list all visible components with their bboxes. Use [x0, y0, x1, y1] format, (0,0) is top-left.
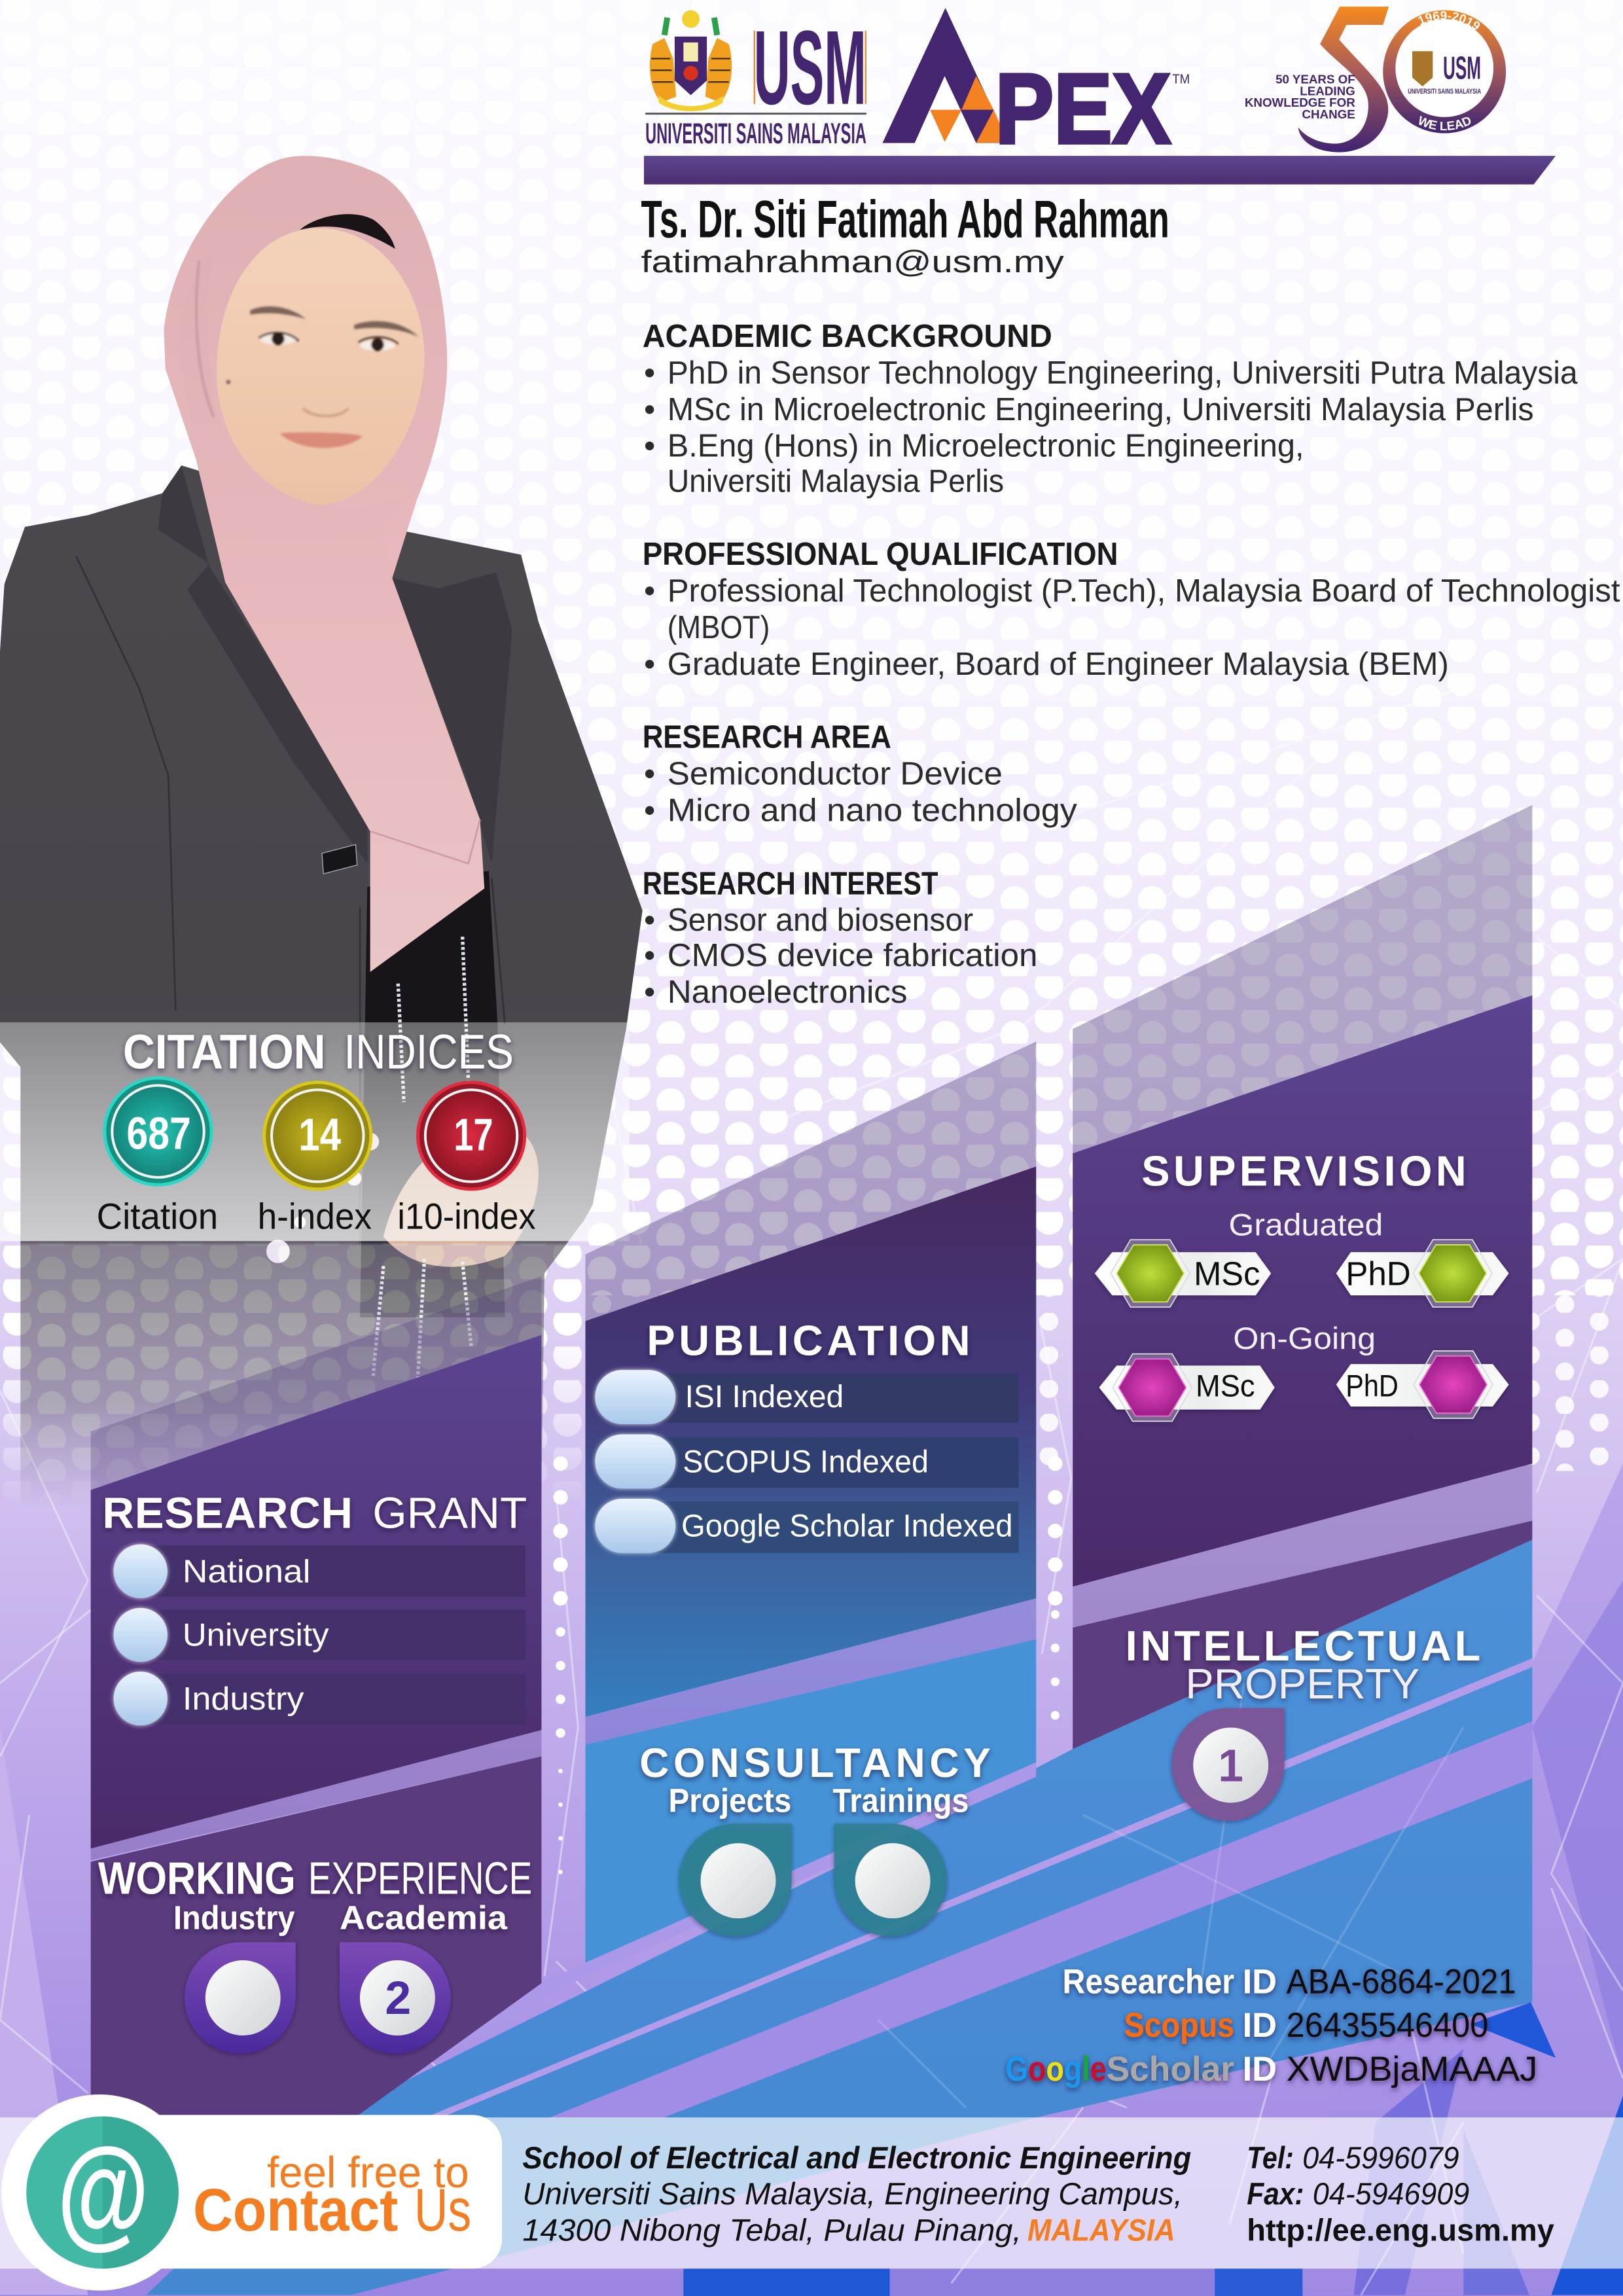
chip: on-going MSc: MSc	[1196, 1368, 1255, 1403]
text block: research area	[643, 719, 1077, 829]
row: Google Scholar indexed: Google Scholar Indexed	[681, 1508, 1012, 1543]
text block: academic background: PhD in Sensor Technology Engineering, Universiti Putra Malaysia	[668, 355, 1578, 391]
text block: research interest: Nanoelectronics	[668, 974, 907, 1010]
scopus id: ID	[1243, 2006, 1277, 2045]
logo: 50 years of USM: WE LEAD	[1419, 116, 1471, 131]
text: phone, fax, web: Tel:	[1247, 2140, 1294, 2175]
heading: citation indices: CITATION	[123, 1024, 326, 1079]
crest	[650, 10, 732, 111]
stat: academia	[340, 1898, 508, 2053]
text: feel free to contact us: Contact	[193, 2177, 398, 2244]
text block: research interest: •	[644, 937, 655, 973]
heading: research grant: RESEARCH	[103, 1489, 353, 1538]
google scholar id	[1005, 2050, 1537, 2089]
text block: professional qualification: (MBOT)	[668, 609, 770, 645]
badge: intellectual property count	[1171, 1708, 1285, 1821]
lapels	[158, 465, 512, 863]
text block: professional qualification	[643, 536, 1620, 682]
logo: 50 years of USM: KNOWLEDGE FOR	[1245, 96, 1355, 109]
logo: 50 years of USM: 1969-2019	[1418, 11, 1480, 30]
row: ISI indexed	[595, 1370, 1018, 1424]
panel: publication	[585, 1041, 1036, 1717]
heading: supervision: SUPERVISION	[1141, 1147, 1467, 1194]
metric: citation 687: Citation	[97, 1196, 218, 1237]
metric: i10-index 17	[397, 1081, 536, 1237]
text block: professional qualification: •	[644, 646, 655, 682]
metric: h-index 14: 14	[298, 1109, 341, 1160]
heading: working experience: WORKING	[98, 1853, 296, 1904]
jacket	[0, 465, 643, 1507]
panel: research grant	[91, 1276, 541, 1848]
logo: 50 years of USM	[1245, 7, 1507, 152]
stat: projects: Projects	[669, 1781, 791, 1819]
text block: research interest	[643, 865, 1038, 1010]
text: USM	[754, 9, 866, 127]
text: phone, fax, web: Fax:	[1247, 2176, 1304, 2211]
google scholar id: Scholar	[1107, 2050, 1234, 2089]
text: on-going: On-Going	[1233, 1321, 1376, 1355]
jacket details	[76, 556, 505, 1244]
text: graduated: Graduated	[1229, 1207, 1383, 1242]
beads and floral	[373, 937, 471, 1390]
stat: industry	[173, 1898, 296, 2053]
heading: working experience: EXPERIENCE	[308, 1853, 532, 1904]
text block: research interest: Sensor and biosensor	[668, 902, 973, 938]
text: feel free to contact us: Us	[414, 2177, 471, 2244]
google scholar id: XWDBjaMAAAJ	[1287, 2050, 1537, 2089]
metric: h-index 14: h-index	[258, 1196, 372, 1237]
stat: projects	[669, 1781, 792, 1937]
logo: 50 years of USM: CHANGE	[1302, 107, 1355, 121]
header bar	[644, 156, 1556, 185]
stat: trainings	[832, 1781, 969, 1937]
scopus id: Scopus	[1124, 2006, 1234, 2045]
stat: trainings: Trainings	[832, 1781, 969, 1819]
researcher identifiers	[1005, 1962, 1537, 2089]
heading: intellectual property	[1126, 1622, 1480, 1708]
logo: 50 years of USM: UNIVERSITI SAINS MALAYSIA	[1408, 88, 1481, 96]
row: national: National	[183, 1553, 311, 1589]
text block: academic background: B.Eng (Hons) in Microelectronic Engineering,	[668, 428, 1304, 464]
heading: working experience	[98, 1853, 532, 1904]
researcher id: ID	[1243, 1962, 1277, 2001]
researcher id: ABA-6864-2021	[1287, 1962, 1516, 2001]
text block: professional qualification: Graduate Engineer, Board of Engineer Malaysia (BEM)	[668, 646, 1449, 682]
text: phone, fax, web: 04-5946909	[1313, 2176, 1469, 2211]
chip: on-going PhD: PhD	[1346, 1368, 1399, 1403]
row: SCOPUS indexed: SCOPUS Indexed	[683, 1444, 929, 1480]
photo: woman in pink hijab and dark blazer	[0, 156, 643, 1507]
logo: APEX: TM	[1172, 72, 1190, 86]
text block: academic background: MSc in Microelectronic Engineering, Universiti Malaysia Perlis	[668, 391, 1534, 427]
heading: intellectual property: PROPERTY	[1185, 1660, 1419, 1708]
chip: graduated MSc	[1095, 1240, 1271, 1307]
researcher id: Researcher	[1063, 1962, 1234, 2001]
text block: academic background	[643, 318, 1578, 499]
logo: Universiti Sains Malaysia	[645, 9, 866, 150]
translucent band	[585, 1041, 1036, 1321]
text block: research area: •	[644, 756, 655, 792]
text block: professional qualification: PROFESSIONAL QUALIFICATION	[643, 536, 1118, 572]
icon: at-sign circle	[1, 2094, 198, 2291]
inner black top	[360, 871, 505, 1318]
text: phone, fax, web: http://ee.eng.usm.my	[1247, 2213, 1554, 2248]
heading: citation indices: INDICES	[344, 1024, 514, 1079]
stat: academia: 2	[385, 1972, 411, 2024]
row: national	[114, 1544, 526, 1598]
text block: research area: Micro and nano technology	[668, 793, 1077, 829]
metric: h-index 14	[258, 1081, 372, 1237]
text: address	[522, 2140, 1191, 2248]
chip: graduated MSc: MSc	[1194, 1254, 1260, 1292]
metric: citation 687: 687	[126, 1107, 191, 1158]
google scholar id: ID	[1243, 2050, 1277, 2089]
stat: academia: Academia	[340, 1898, 508, 1936]
text block: research interest: •	[644, 974, 655, 1010]
row: industry	[114, 1672, 526, 1725]
row: university	[114, 1608, 526, 1662]
footer band	[0, 2094, 1623, 2291]
jacket brooch	[322, 844, 357, 874]
panel: intellectual property	[1073, 1520, 1532, 1821]
metric: i10-index 17: 17	[454, 1109, 493, 1160]
google scholar id: Google	[1005, 2050, 1107, 2089]
panel: consultancy	[585, 1640, 1036, 1963]
row: university: University	[183, 1617, 329, 1653]
text: phone, fax, web	[1247, 2140, 1554, 2248]
text: address: Universiti Sains Malaysia, Engineering Campus,	[522, 2176, 1183, 2211]
scopus id	[1124, 2006, 1488, 2045]
text block: research area: RESEARCH AREA	[643, 719, 891, 755]
row: industry: Industry	[183, 1681, 304, 1717]
hands	[383, 1128, 539, 1267]
heading: publication: PUBLICATION	[647, 1317, 971, 1365]
text block: academic background: Universiti Malaysia Perlis	[668, 463, 1004, 499]
text block: academic background: ACADEMIC BACKGROUND	[643, 318, 1052, 354]
chip: graduated PhD	[1336, 1240, 1509, 1307]
text: feel free to contact us: feel free to	[267, 2148, 469, 2197]
chip: on-going PhD	[1336, 1351, 1509, 1418]
text: address: MALAYSIA	[1027, 2213, 1175, 2248]
panel: working experience	[91, 1756, 541, 2115]
heading: research grant	[103, 1489, 527, 1538]
text: email: fatimahrahman@usm.my	[641, 244, 1064, 279]
text block: academic background: •	[644, 391, 655, 427]
chip: on-going MSc	[1099, 1354, 1275, 1421]
chip: graduated PhD: PhD	[1346, 1254, 1411, 1292]
blue diagonal background strips	[147, 1540, 1556, 2295]
hijab front drape	[179, 246, 484, 972]
translucent connector bands between panels	[91, 1463, 1532, 1860]
text: address: School of Electrical and Electronic Engineering	[522, 2140, 1191, 2175]
row: ISI indexed: ISI Indexed	[685, 1379, 844, 1414]
translucent band	[1073, 805, 1532, 1153]
heading: consultancy: CONSULTANCY	[639, 1740, 991, 1786]
researcher id	[1063, 1962, 1516, 2001]
text block: research area: Semiconductor Device	[668, 756, 1003, 792]
logo: Universiti Sains Malaysia: UNIVERSITI SAINS MALAYSIA	[645, 118, 866, 150]
eyes, brows, nose, mouth	[226, 306, 419, 448]
translucent band	[91, 1276, 541, 1490]
panel: supervision	[1073, 805, 1532, 1587]
logo: 50 years of USM: LEADING	[1300, 84, 1355, 98]
text block: professional qualification: •	[644, 573, 655, 609]
text block: research interest: CMOS device fabrication	[668, 937, 1038, 973]
heading: research grant: GRANT	[372, 1489, 527, 1538]
gap dot columns	[560, 1463, 1055, 1895]
logo: 50 years of USM: USM	[1443, 50, 1481, 86]
logo: APEX: PEX	[995, 53, 1171, 164]
text: feel free to contact us	[193, 2148, 471, 2244]
text block: academic background: •	[644, 428, 655, 464]
contact pill	[88, 2115, 502, 2269]
text block: research interest: RESEARCH INTEREST	[643, 865, 938, 901]
title: name: Ts. Dr. Siti Fatimah Abd Rahman	[641, 190, 1169, 249]
face	[217, 228, 425, 505]
text block: professional qualification: Professional Technologist (P.Tech), Malaysia Board of Technologist	[668, 573, 1620, 609]
text block: research interest: •	[644, 902, 655, 938]
scopus id: 26435546400	[1287, 2006, 1488, 2045]
logo: APEX	[882, 8, 1190, 164]
text block: academic background: •	[644, 355, 655, 391]
row: SCOPUS indexed	[595, 1435, 1018, 1488]
row: Google Scholar indexed	[595, 1499, 1018, 1553]
heading: citation indices	[123, 1024, 514, 1079]
panel: citation indices band	[0, 1022, 630, 1241]
hijab back	[164, 156, 484, 972]
badge: intellectual property count: 1	[1218, 1740, 1243, 1791]
text: address: 14300 Nibong Tebal, Pulau Pinang,	[522, 2213, 1022, 2248]
under cap	[300, 214, 395, 249]
text block: research area: •	[644, 793, 655, 829]
icon: at-sign circle: @	[57, 2123, 149, 2260]
metric: citation 687	[97, 1077, 218, 1237]
stat: industry: Industry	[173, 1898, 295, 1936]
metric: i10-index 17: i10-index	[397, 1196, 536, 1237]
heading: intellectual property: INTELLECTUAL	[1126, 1622, 1480, 1670]
logo: 50 years of USM: 50 YEARS OF	[1275, 72, 1355, 86]
text: phone, fax, web: 04-5996079	[1302, 2140, 1459, 2175]
